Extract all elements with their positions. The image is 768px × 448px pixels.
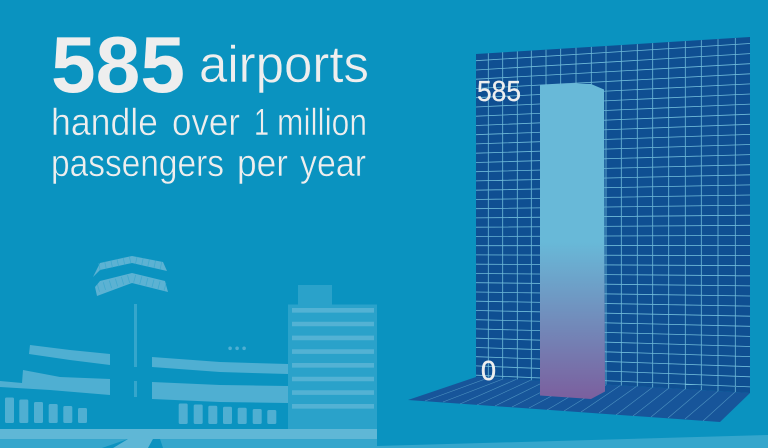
tower mast — [134, 304, 137, 397]
canopy segments — [98, 260, 166, 288]
airports word: airports — [199, 36, 369, 94]
distant dots — [228, 346, 246, 350]
office building — [288, 285, 377, 430]
axis label 0: 0 — [481, 355, 496, 386]
tower upper canopy — [93, 256, 167, 277]
headline text — [51, 20, 369, 185]
right terminal lower roof — [152, 382, 288, 403]
bar — [540, 84, 605, 399]
second line: over — [172, 102, 240, 144]
floor grid lines — [425, 378, 735, 421]
runway surface — [113, 439, 153, 448]
runway shadow right — [148, 439, 163, 448]
runway — [0, 429, 377, 448]
3D bar chart — [408, 37, 750, 422]
tower lower canopy — [95, 273, 168, 296]
chart floor — [408, 377, 750, 422]
ground band right — [377, 435, 768, 448]
third line: per — [237, 143, 288, 185]
big number: 585 — [51, 20, 185, 109]
airport illustration — [0, 256, 377, 448]
left terminal windows — [5, 398, 87, 423]
building body — [288, 285, 377, 430]
right terminal — [152, 346, 288, 424]
chart back wall — [476, 37, 750, 393]
second line — [51, 102, 367, 144]
runway shadow left — [102, 439, 128, 448]
axis label 585: 585 — [477, 76, 521, 108]
second line: million — [277, 102, 367, 144]
second line: 1 — [254, 102, 269, 144]
third line: passengers — [51, 143, 224, 185]
right terminal upper roof — [152, 357, 288, 374]
control tower — [93, 256, 168, 397]
building floors — [292, 308, 374, 409]
ground strip — [0, 429, 377, 439]
left terminal lower roof — [0, 370, 110, 395]
right terminal windows — [179, 404, 276, 424]
second line: handle — [51, 102, 158, 144]
wall grid lines — [476, 38, 750, 392]
left terminal upper roof — [29, 345, 110, 365]
apron — [0, 439, 377, 448]
third line — [51, 143, 366, 185]
third line: year — [300, 143, 366, 185]
left terminal — [0, 345, 110, 423]
